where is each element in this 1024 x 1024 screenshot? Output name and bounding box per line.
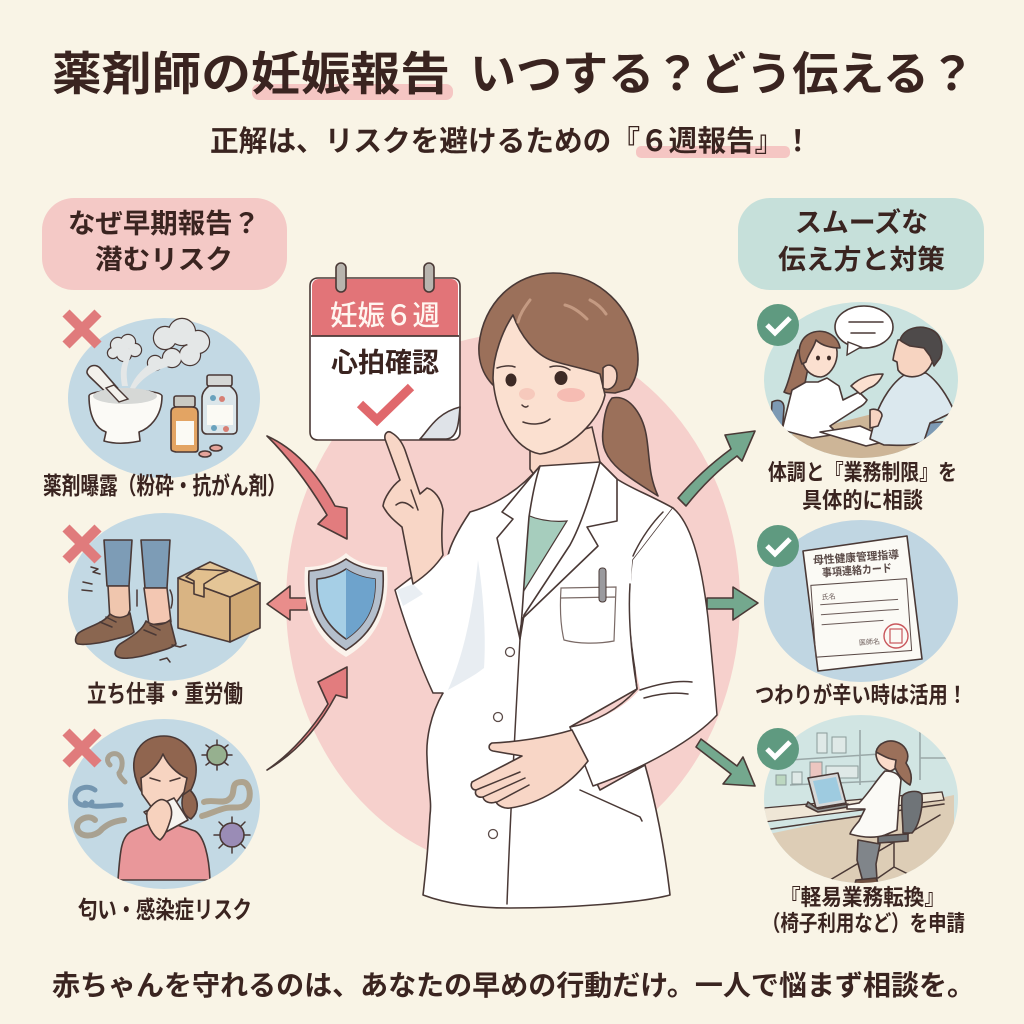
coat shading (448, 560, 485, 690)
arrow: shield to work (267, 586, 307, 620)
title: 薬剤師の妊娠報告 (52, 48, 450, 100)
face (493, 315, 605, 454)
icon: orange bottle (171, 396, 198, 452)
heading: risks (42, 198, 287, 290)
pink background blob (286, 334, 740, 870)
label: standing work: 立ち仕事・重労働 (87, 681, 243, 708)
right arm sleeve (570, 508, 717, 786)
counter (764, 792, 944, 822)
shirt (520, 515, 567, 597)
panel: light duty (764, 715, 960, 890)
icon: purple virus (214, 817, 250, 853)
label: consult concrete limits: 具体的に相談 (802, 488, 923, 513)
pointing hand (383, 432, 443, 584)
icon: legs and shoes (76, 540, 186, 662)
calendar header (312, 279, 458, 336)
lower pocket (580, 790, 642, 821)
bottom message: 赤ちゃんを守れるのは、あなたの早めの行動だけ。一人で悩まず相談を。 (52, 970, 975, 1001)
man consulting (870, 327, 954, 445)
label: consult concrete limits (768, 460, 957, 513)
icon: red cross 1 (66, 313, 98, 345)
desk (792, 414, 931, 458)
icon: green check 2 (757, 525, 799, 567)
icon: woman with tissue (118, 736, 210, 880)
lapel right (520, 462, 617, 639)
label: drug exposure: 薬剤曝露（粉砕・抗がん剤） (43, 472, 286, 500)
heading: smooth communication (738, 198, 984, 290)
icon: red cross 3 (66, 732, 98, 764)
coat torso (423, 462, 673, 908)
label: request light duty: （椅子利用など）を申請 (762, 911, 965, 936)
icon: green check 1 (757, 304, 799, 346)
label: request light duty: 『軽易業務転換』 (780, 885, 945, 910)
icon: cardboard box (178, 562, 260, 642)
arrow: infection to shield (267, 667, 347, 770)
label: request light duty (762, 885, 965, 936)
arrow: exposure to shield (267, 436, 347, 539)
icon: dust clouds (108, 319, 209, 390)
label: consult concrete limits: 体調と『業務制限』を (768, 460, 957, 485)
document card: 医師名 (859, 637, 880, 647)
left sleeve (395, 552, 452, 693)
calendar body (310, 278, 460, 440)
hair highlights (518, 300, 606, 322)
icon: mortar and pestle (87, 366, 162, 443)
icon: green virus (202, 740, 232, 770)
calendar body text: 心拍確認 (331, 348, 439, 378)
chest pocket (560, 587, 616, 643)
lapel left (497, 466, 540, 639)
heading: risks: 潜むリスク (95, 245, 233, 275)
panel: odor infection risk (68, 719, 260, 889)
pharmacist figure (383, 273, 717, 908)
pharmacy shelves (776, 730, 960, 785)
icon: green check 3 (757, 728, 799, 770)
buttons (488, 648, 514, 838)
panel: drug exposure risk (68, 318, 260, 478)
chairs (770, 400, 785, 427)
calendar header text: 妊娠６週 (330, 300, 440, 331)
title (52, 48, 975, 100)
arrow: to light duty (696, 739, 755, 786)
panel: health card (764, 520, 958, 682)
heading: risks: なぜ早期報告？ (68, 209, 260, 239)
seated woman (847, 741, 911, 887)
eyes, cheeks, mouth (497, 366, 585, 424)
document card: 氏名 (821, 592, 836, 602)
icon: red cross 2 (66, 528, 98, 560)
ponytail (603, 398, 658, 496)
ear (603, 365, 617, 389)
title: いつする？どう伝える？ (470, 48, 975, 100)
icon: smoke swirls (75, 754, 250, 836)
label: odor and infection: 匂い・感染症リスク (78, 897, 252, 924)
panel: standing work risk (68, 513, 260, 681)
pen (599, 568, 606, 602)
heading: smooth communication: 伝え方と対策 (778, 245, 945, 275)
arrow: to consultation (678, 431, 755, 506)
woman consulting (782, 331, 892, 446)
document card: 事項連絡カード (822, 561, 892, 580)
monitor (806, 773, 848, 812)
speech bubble (835, 306, 893, 355)
check mark (360, 387, 411, 420)
icon: shield (304, 553, 388, 657)
arrow: to card (707, 587, 758, 620)
document card (803, 536, 922, 671)
hair back (479, 273, 638, 393)
heading: smooth communication: スムーズな (795, 207, 928, 238)
chair (902, 791, 922, 833)
calendar (310, 263, 460, 440)
neck (530, 427, 600, 509)
subtitle: 正解は、リスクを避けるための『６週報告』！ (210, 125, 812, 158)
panel: consultation (764, 302, 960, 472)
floor (772, 795, 954, 883)
resting hand (471, 730, 588, 808)
document card: 母性健康管理指導 (813, 547, 899, 567)
label: use when morning sickness: つわりが辛い時は活用！ (755, 682, 967, 708)
coat front line (507, 639, 520, 904)
icon: pill jar (199, 375, 237, 457)
